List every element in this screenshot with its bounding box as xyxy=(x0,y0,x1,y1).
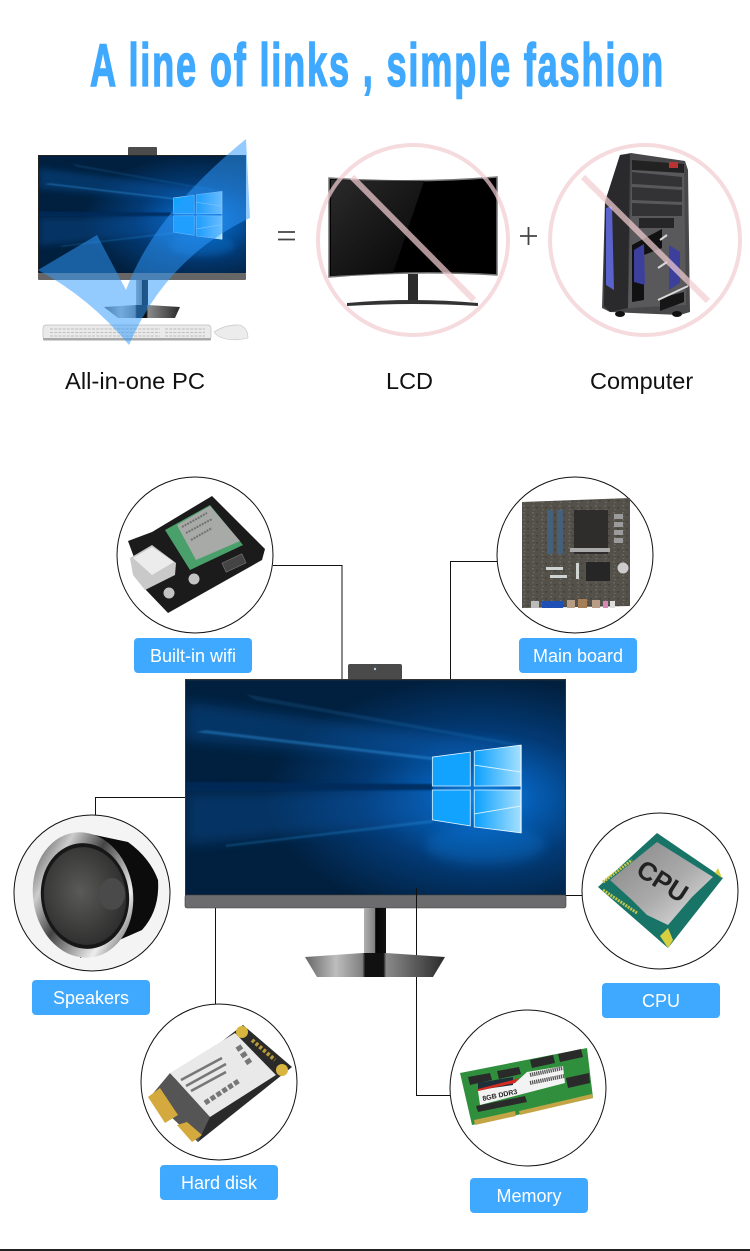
stand neck xyxy=(364,908,386,956)
feet xyxy=(615,311,682,317)
button: Main board xyxy=(519,638,637,673)
mouse xyxy=(214,325,248,340)
central monitor xyxy=(185,664,566,977)
barcode xyxy=(530,1068,564,1083)
case body xyxy=(602,153,690,315)
heat spreader xyxy=(610,842,713,925)
memory connector segment over screen xyxy=(416,888,418,908)
contact pads xyxy=(252,1040,275,1060)
plus sign xyxy=(520,227,537,245)
component: memory xyxy=(450,1010,606,1166)
green module xyxy=(165,505,243,570)
red label band xyxy=(478,1078,519,1091)
curved LCD monitor xyxy=(329,177,497,306)
button: Built-in wifi xyxy=(134,638,252,673)
dark label tag xyxy=(478,1077,513,1090)
component: speaker xyxy=(14,815,170,971)
LCD stand xyxy=(347,274,478,306)
heatsink xyxy=(586,562,610,581)
screen xyxy=(185,679,566,896)
equals sign xyxy=(278,232,295,240)
slots xyxy=(546,563,579,579)
blue check mark xyxy=(38,139,250,345)
side window xyxy=(606,206,614,290)
side shadow xyxy=(604,154,630,312)
barcode lines xyxy=(181,1046,250,1103)
circle xyxy=(141,1004,297,1160)
bezel xyxy=(185,895,566,908)
screen reflection xyxy=(331,180,424,276)
drive bays xyxy=(632,172,682,228)
keyboard xyxy=(43,325,211,340)
button: Memory xyxy=(470,1178,588,1213)
front panel xyxy=(628,160,686,308)
module print xyxy=(182,513,212,540)
white label xyxy=(478,1066,565,1105)
button: CPU: CPU xyxy=(642,991,680,1011)
label: All-in-one PC: All-in-one PC xyxy=(65,368,205,394)
front vents xyxy=(632,229,688,311)
crossed circle: LCD xyxy=(318,145,508,335)
dust cap xyxy=(99,878,125,910)
connector area xyxy=(150,1073,210,1142)
stand xyxy=(104,280,180,318)
computer tower xyxy=(602,153,690,317)
vga and io ports xyxy=(531,599,615,608)
all-in-one PC illustration with tick xyxy=(38,139,250,345)
circle xyxy=(450,1010,606,1166)
silver shield xyxy=(177,506,240,560)
circle xyxy=(117,477,273,633)
gold contacts xyxy=(474,1094,593,1125)
button: Speakers: Speakers xyxy=(53,988,129,1008)
pcb detail xyxy=(522,498,630,608)
cpu lettering: CPU xyxy=(631,854,694,909)
circle xyxy=(582,813,738,969)
chrome rim xyxy=(25,826,141,964)
monitor bezel xyxy=(38,273,246,280)
green substrate xyxy=(598,833,723,948)
speaker back xyxy=(80,834,158,958)
component: CPU xyxy=(582,813,738,969)
crossed circle: computer xyxy=(550,145,740,335)
monitor screen xyxy=(38,155,246,273)
component: hard disk xyxy=(141,1004,297,1160)
button: Hard disk xyxy=(160,1165,278,1200)
pcb xyxy=(522,498,630,608)
bottom rule xyxy=(0,1249,750,1251)
mounting holes xyxy=(236,1026,288,1076)
webcam xyxy=(128,147,157,156)
button: Speakers xyxy=(32,980,150,1015)
label: LCD: LCD xyxy=(386,368,433,394)
connector lines xyxy=(96,562,583,1096)
gold edge connector xyxy=(148,1088,202,1142)
gold contacts xyxy=(603,860,637,913)
cmos battery xyxy=(618,562,628,574)
green pcb xyxy=(460,1048,593,1125)
button: CPU xyxy=(602,983,720,1018)
button: Memory: Memory xyxy=(496,1186,562,1206)
component: wifi board xyxy=(117,477,273,633)
LCD panel xyxy=(329,177,497,277)
ethernet jack xyxy=(130,545,176,590)
pcb xyxy=(150,1025,292,1142)
memory chips xyxy=(468,1049,590,1112)
label: Computer: Computer xyxy=(590,368,693,394)
component: main board xyxy=(497,477,653,633)
label text: 8GB DDR3 xyxy=(482,1089,518,1103)
button: Hard disk: Hard disk xyxy=(181,1173,258,1193)
cone xyxy=(38,842,132,950)
top controls xyxy=(632,160,684,173)
capacitors xyxy=(164,574,200,598)
vrm components xyxy=(614,514,623,543)
webcam xyxy=(348,664,402,680)
cpu socket xyxy=(570,510,610,554)
stand base xyxy=(305,953,445,977)
white label xyxy=(170,1033,276,1117)
circle xyxy=(497,477,653,633)
button: Main board: Main board xyxy=(533,646,623,666)
ethernet label xyxy=(133,547,174,575)
gold corners xyxy=(660,868,722,948)
ram slots xyxy=(547,510,563,554)
circle xyxy=(14,815,170,971)
chip xyxy=(222,554,246,572)
button: Built-in wifi: Built-in wifi xyxy=(150,646,236,666)
pcb xyxy=(128,496,265,613)
inner ring xyxy=(34,837,136,955)
